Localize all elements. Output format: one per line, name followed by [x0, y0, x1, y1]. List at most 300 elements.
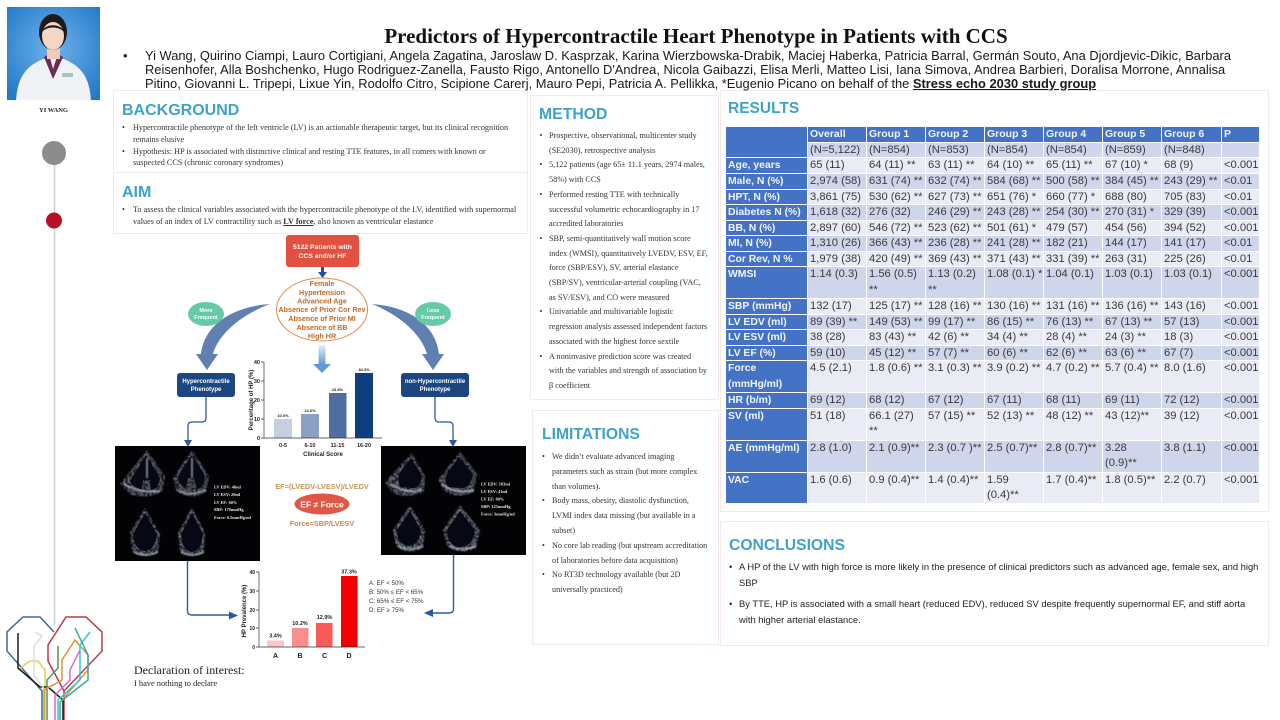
results table: <0.01	[1224, 237, 1252, 249]
results table: **	[869, 284, 878, 296]
badge: less frequent	[415, 302, 451, 326]
results table: 660 (77) *	[1046, 191, 1095, 203]
results table: (N=848)	[1164, 144, 1205, 156]
results table: 66.1 (27)	[869, 410, 914, 422]
badge: less frequent: Frequent	[421, 315, 445, 321]
results table: Group 3	[987, 128, 1027, 140]
results table: 1.6 (0.6)	[810, 474, 852, 486]
formula: force: Force=SBP/LVESV	[290, 519, 354, 528]
results table: BB, N (%)	[728, 223, 775, 234]
method text: (SBP/SV), ventricular-arterial coupling (VAC,	[549, 278, 701, 287]
results table: 149 (53) **	[869, 316, 922, 328]
declaration of interest	[134, 663, 245, 688]
results table: (N=859)	[1105, 144, 1146, 156]
badge: more frequent	[188, 302, 224, 326]
results table: 2.1 (0.9)**	[869, 442, 919, 454]
results table: <0.001	[1224, 394, 1259, 406]
badge: ef not force	[294, 494, 350, 514]
results table: 1.7 (0.4)**	[1046, 474, 1096, 486]
results table: 125 (17) **	[869, 300, 922, 312]
results table: Male, N (%)	[728, 176, 783, 187]
results table: 8.0 (1.6)	[1164, 362, 1206, 374]
method text: •	[540, 131, 542, 140]
box: non-hypercontractile phenotype: Phenotype	[420, 387, 451, 393]
box: patients: 5122 Patients with	[293, 244, 352, 251]
results table: 369 (43) **	[928, 253, 982, 265]
heading: method: METHOD	[539, 106, 607, 123]
results table: 225 (26)	[1164, 253, 1206, 265]
panel: aim	[113, 172, 528, 234]
heading: conclusions: CONCLUSIONS	[729, 537, 845, 554]
echo images: non-hypercontractile: SBP: 125mmHg	[481, 504, 511, 509]
method text: accredited laboratories	[549, 219, 623, 228]
results table: WMSI	[728, 269, 756, 280]
results table: 501 (61) *	[987, 222, 1036, 234]
box: hypercontractile phenotype: Phenotype	[191, 387, 222, 393]
flowchart diagram	[115, 235, 526, 660]
bar chart: clinical score: 30	[254, 379, 260, 385]
oval: clinical predictors: Female	[310, 279, 334, 288]
oval: clinical predictors	[276, 278, 368, 341]
badge: less frequent: Less	[427, 308, 439, 314]
limitations text: No RT3D technology available (but 2D	[552, 570, 680, 579]
results table: 67 (13) **	[1105, 316, 1152, 328]
oval: clinical predictors: Absence of BB	[296, 323, 348, 332]
method text: •	[540, 190, 542, 199]
aim text: values of an index of LV contractility such as LV force, also known as ventricular elastance	[133, 217, 433, 226]
oval: clinical predictors: Absence of Prior Cor Rev	[278, 305, 366, 314]
results table: 584 (68) **	[987, 175, 1040, 187]
results table: 69 (11)	[1105, 394, 1140, 406]
results table: 1,310 (26)	[810, 237, 861, 249]
results table	[726, 127, 1259, 503]
bar chart: hp prevalence by ef: 40	[249, 570, 255, 576]
limitations text: universally practiced)	[552, 585, 623, 594]
panel: limitations	[532, 410, 719, 645]
results table: SBP (mmHg)	[728, 301, 791, 312]
results table: (mmHg/ml)	[728, 379, 782, 390]
results table: 1.8 (0.5)**	[1105, 474, 1155, 486]
results table: 688 (80)	[1105, 191, 1147, 203]
box: non-hypercontractile phenotype	[401, 373, 469, 397]
results table: 52 (13) **	[987, 410, 1034, 422]
echo images: hypercontractile: LV EF: 60%	[214, 500, 237, 505]
results table: (0.9)**	[1105, 457, 1137, 469]
legend: ef classes: B: 50% ≤ EF < 65%	[369, 589, 424, 596]
results table: 141 (17)	[1164, 237, 1206, 249]
heading: background: BACKGROUND	[122, 102, 239, 119]
box: hypercontractile phenotype	[177, 373, 235, 397]
bar chart: hp prevalence by ef: 10.2%	[292, 621, 308, 627]
timeline	[42, 141, 66, 625]
box: patients	[286, 235, 359, 267]
results table: <0.01	[1224, 175, 1252, 187]
authors	[123, 48, 1232, 91]
background text: suspected CCS (chronic coronary syndromes)	[133, 158, 283, 167]
oval: clinical predictors: Absence of Prior MI	[288, 314, 356, 323]
results table: 1.8 (0.6) **	[869, 362, 922, 374]
results table: 2,897 (60)	[810, 222, 861, 234]
results table: 651 (76) *	[987, 191, 1036, 203]
results table: 143 (16)	[1164, 300, 1206, 312]
method text: β coefficient	[549, 381, 590, 390]
limitations text: subset)	[552, 526, 575, 535]
method text: Performed resting TTE with technically	[549, 190, 679, 199]
conclusions text: with higher arterial elastance.	[739, 615, 861, 625]
results table: 0.9 (0.4)**	[869, 474, 919, 486]
results table: 132 (17)	[810, 300, 852, 312]
bar chart: hp prevalence by ef: D	[346, 653, 352, 660]
results table: 45 (12) **	[869, 347, 916, 359]
formula: ejection fraction: EF=(LVEDV-LVESV)/LVEDV	[275, 482, 369, 491]
connector: right to echo	[435, 397, 457, 447]
conclusions text: By TTE, HP is associated with a small heart (reduced EDV), reduced SV despite frequently supernormal EF, and stiff aorta	[739, 599, 1245, 609]
results table: 67 (11)	[987, 394, 1022, 406]
arrow: less frequent	[372, 304, 444, 370]
results table: (N=854)	[869, 144, 910, 156]
bar chart: hp prevalence by ef: 12.9%	[317, 615, 332, 621]
results table: 2,974 (58)	[810, 175, 861, 187]
results table: 705 (83)	[1164, 191, 1206, 203]
results table: 68 (9)	[1164, 159, 1193, 171]
badge: more frequent: More	[199, 308, 213, 314]
echo images: hypercontractile: SBP: 170mmHg	[214, 507, 244, 512]
results table: 24 (3) **	[1105, 331, 1146, 343]
results table: 57 (7) **	[928, 347, 969, 359]
results table: 1.04 (0.1)	[1046, 268, 1094, 280]
results table: <0.001	[1224, 474, 1259, 486]
results table: 86 (15) **	[987, 316, 1034, 328]
results table: HPT, N (%)	[728, 192, 780, 203]
oval: clinical predictors: High HR	[308, 332, 337, 340]
results table: 1,618 (32)	[810, 206, 861, 218]
method text: Prospective, observational, multicenter study	[549, 131, 697, 140]
limitations text: •	[542, 452, 545, 461]
background text	[122, 123, 508, 167]
results table: **	[928, 284, 937, 296]
results table: 38 (28)	[810, 331, 845, 343]
authors: Reisenhofer, Alla Boshchenko, Hugo Rodriguez-Zanella, Fausto Rigo, Antonello D'Andrea, Nicola Gaibazzi, Elisa Merli, Matteo Lisi, Iana Simova, Andrea Barbieri, Doralisa Morrone, Annalisa	[145, 62, 1225, 77]
method text: A noninvasive prediction score was created	[549, 352, 691, 361]
results table: 530 (62) **	[869, 191, 922, 203]
results table: <0.001	[1224, 159, 1259, 171]
panel: background	[113, 90, 528, 173]
bar chart: hp prevalence by ef: 0	[252, 645, 255, 651]
bar chart: clinical score: 0-5	[279, 443, 287, 449]
arrow: patients to predictors	[318, 267, 327, 278]
results table: 1.14 (0.3)	[810, 268, 858, 280]
method text: •	[540, 160, 542, 169]
results table: 394 (52)	[1164, 222, 1206, 234]
panel: conclusions	[720, 521, 1269, 646]
results table: AE (mmHg/ml)	[728, 443, 800, 454]
results table: 68 (12)	[869, 394, 904, 406]
results table: 523 (62) **	[928, 222, 982, 234]
results table: 276 (32)	[869, 206, 911, 218]
results table: <0.001	[1224, 362, 1259, 374]
results table: 83 (43) **	[869, 331, 916, 343]
heading: limitations: LIMITATIONS	[542, 426, 640, 443]
results table: 65 (11)	[810, 159, 845, 171]
results table: 546 (72) **	[869, 222, 922, 234]
box: non-hypercontractile phenotype: non-Hypercontractile	[405, 379, 466, 385]
method text	[540, 131, 708, 390]
results table: 236 (28) **	[928, 237, 982, 249]
legend: ef classes: D: EF ≥ 75%	[369, 607, 405, 614]
bar chart: clinical score: 10.0%	[277, 413, 289, 418]
limitations text: Body mass, obesity, diastolic dysfunction,	[552, 496, 689, 505]
results table: (N=5,122)	[810, 144, 860, 156]
bar chart: clinical score: 6-10	[304, 443, 316, 449]
oval: clinical predictors: Hypertension	[299, 288, 345, 297]
results table: 1.08 (0.1) *	[987, 268, 1042, 280]
connector: left echo to ef chart	[188, 561, 238, 620]
results table: 4.7 (0.2) **	[1046, 362, 1099, 374]
conclusions text: SBP	[739, 578, 758, 588]
legend: ef classes: C: 65% ≤ EF < 75%	[369, 598, 424, 605]
limitations text: •	[542, 541, 545, 550]
echo images: hypercontractile: LV ESV: 20ml	[214, 492, 241, 497]
bar chart: clinical score: 40	[254, 360, 260, 366]
results table: 65 (11) **	[1046, 159, 1092, 171]
method text: •	[540, 307, 542, 316]
bar chart: clinical score: 34.3%	[358, 367, 370, 372]
bar chart: clinical score: 23.8%	[332, 387, 344, 392]
results table: (N=854)	[987, 144, 1028, 156]
echo images: non-hypercontractile	[381, 446, 526, 555]
results table: <0.001	[1224, 331, 1259, 343]
declaration of interest: Declaration of interest:	[134, 663, 245, 677]
results table: 2.8 (1.0)	[810, 442, 852, 454]
authors: •	[123, 48, 128, 62]
echo images: non-hypercontractile: LV ESV: 41ml	[481, 489, 508, 494]
arrow: more frequent	[196, 304, 270, 370]
bar chart: hp prevalence by ef: 20	[249, 608, 255, 614]
limitations text: than volumes).	[552, 482, 600, 491]
conclusions text: •	[729, 562, 732, 572]
bar chart: clinical score: 10	[254, 417, 260, 423]
panel: method	[530, 95, 719, 400]
echo images: hypercontractile: Force: 6.5mmHg/ml	[214, 515, 252, 520]
results table: P	[1224, 128, 1231, 140]
bar chart: clinical score: Clinical Score	[303, 452, 344, 458]
bar chart: hp prevalence by ef: C	[322, 653, 327, 660]
authors: Pitino, Giovanni L. Tripepi, Lixue Yin, Rodolfo Citro, Scipione Carerj, Mauro Pepi, Patricia A. Pellikka, *Eugenio Picano on behalf of the Stress echo 2030 study group	[145, 76, 1096, 91]
results table: 4.5 (2.1)	[810, 362, 852, 374]
method text: Univariable and multivariable logistic	[549, 307, 673, 316]
results table: 89 (39) **	[810, 316, 857, 328]
legend: ef classes	[369, 580, 424, 614]
aim text	[122, 205, 516, 226]
background text: Hypothesis: HP is associated with distinctive clinical and resting TTE features, in all comers with known or	[133, 147, 486, 156]
legend: ef classes: A: EF < 50%	[369, 580, 404, 587]
method text: index (WMSI), quantitatively LVEDV, ESV, EF,	[549, 249, 708, 258]
results table: <0.01	[1224, 253, 1252, 265]
bar chart: clinical score: Percentage of HP (%)	[249, 370, 255, 430]
limitations text	[542, 452, 707, 594]
results table: (N=853)	[928, 144, 969, 156]
results table: **	[869, 425, 878, 437]
results table: <0.001	[1224, 316, 1259, 328]
results table: <0.001	[1224, 347, 1259, 359]
results table: 76 (13) **	[1046, 316, 1093, 328]
results table: 479 (57)	[1046, 222, 1088, 234]
results table: 366 (43) **	[869, 237, 922, 249]
background text: •	[122, 147, 125, 156]
logo: metro-line heart	[6, 616, 103, 720]
method text: •	[540, 352, 542, 360]
bar chart: hp prevalence by ef: A	[273, 653, 278, 660]
results table: 371 (43) **	[987, 253, 1040, 265]
method text: associated with the highest force sextile	[549, 337, 679, 346]
bar chart: hp prevalence by ef: HP Prevalence (%)	[242, 585, 248, 637]
results table: Group 4	[1046, 128, 1086, 140]
results table: 246 (29) **	[928, 206, 982, 218]
results table: Group 6	[1164, 128, 1204, 140]
results table: 39 (12)	[1164, 410, 1199, 422]
bar chart: clinical score: 13.0%	[304, 408, 316, 413]
conclusions text	[729, 562, 1258, 625]
results table: 64 (10) **	[987, 159, 1034, 171]
badge: more frequent: Frequent	[194, 315, 218, 321]
results table: 1,979 (38)	[810, 253, 861, 265]
results table: 1.03 (0.1)	[1105, 268, 1153, 280]
results table: 67 (10) *	[1105, 159, 1148, 171]
results table: 63 (6) **	[1105, 347, 1146, 359]
echo images: non-hypercontractile: LV EF: 60%	[481, 496, 504, 502]
results table: Diabetes N (%)	[728, 207, 801, 218]
bar chart: clinical score: 16-20	[357, 443, 371, 449]
bar chart: hp prevalence by ef: 30	[249, 589, 255, 595]
results table: 1.59	[987, 474, 1009, 486]
method text: with the variables and strength of association by	[549, 366, 707, 375]
results table: 34 (4) **	[987, 331, 1028, 343]
bar chart: clinical score: 0	[257, 436, 260, 442]
results table: 2.8 (0.7)**	[1046, 442, 1096, 454]
method text: as SV/ESV), and CO were measured	[549, 293, 670, 302]
results table: HR (b/m)	[728, 395, 771, 406]
limitations text: LVMI index data missing (but available in a	[552, 511, 695, 520]
results table: 63 (11) **	[928, 159, 974, 171]
results table: 128 (16) **	[928, 300, 982, 312]
results table: 136 (16) **	[1105, 300, 1158, 312]
results table: 51 (18)	[810, 410, 845, 422]
results table: 130 (16) **	[987, 300, 1040, 312]
results table: (N=854)	[1046, 144, 1087, 156]
results table: Group 1	[869, 128, 909, 140]
results table: Overall	[810, 128, 846, 140]
results table: <0.001	[1224, 442, 1259, 454]
aim text: To assess the clinical variables associated with the hypercontractile phenotype of the LV, identified with supernormal	[133, 205, 516, 214]
results table: (0.4)**	[987, 489, 1019, 501]
results table: 57 (13)	[1164, 316, 1199, 328]
aim text: •	[122, 205, 125, 214]
results table: LV EDV (ml)	[728, 317, 787, 328]
limitations text: •	[542, 496, 545, 505]
results table: 64 (11) **	[869, 159, 915, 171]
results table: 62 (6) **	[1046, 347, 1087, 359]
results table: 632 (74) **	[928, 175, 982, 187]
limitations text: parameters such as strain (but more complex	[552, 467, 697, 476]
method text: successful volumetric echocardiography in 17	[549, 205, 700, 214]
method text: •	[540, 234, 542, 243]
results table: SV (ml)	[728, 411, 764, 422]
results table: <0.01	[1224, 191, 1252, 203]
results table: VAC	[728, 475, 749, 486]
background text: •	[122, 123, 125, 132]
results table: 2.2 (0.7)	[1164, 474, 1206, 486]
heading: aim: AIM	[122, 184, 151, 201]
connector: left to echo	[184, 397, 206, 447]
results table: 384 (45) **	[1105, 175, 1158, 187]
results table: 1.13 (0.2)	[928, 268, 976, 280]
results table: LV EF (%)	[728, 348, 776, 359]
results table: 420 (49) **	[869, 253, 922, 265]
bar chart: hp prevalence by ef: 10	[249, 626, 255, 632]
results table: LV ESV (ml)	[728, 332, 786, 343]
limitations text: No core lab reading (but upstream accreditation	[552, 541, 707, 550]
results table: Group 2	[928, 128, 968, 140]
results table: 454 (56)	[1105, 222, 1147, 234]
results table: 631 (74) **	[869, 175, 922, 187]
results table: Age, years	[728, 160, 781, 171]
results table: 3.1 (0.3) **	[928, 362, 981, 374]
echo images: hypercontractile	[115, 446, 260, 561]
declaration of interest: I have nothing to declare	[134, 679, 217, 688]
box: patients: CCS and/or HF	[299, 253, 346, 260]
method text: 5,122 patients (age 65± 11.1 years, 2974 males,	[549, 160, 705, 169]
results table: 243 (29) **	[1164, 175, 1218, 187]
results table: 627 (73) **	[928, 191, 982, 203]
method text: (SE2030), retrospective analysis	[549, 146, 655, 155]
results table: 1.4 (0.4)**	[928, 474, 978, 486]
limitations text: of laboratories before data acquisition)	[552, 556, 678, 565]
panel: results	[720, 90, 1269, 512]
results table: 18 (3)	[1164, 331, 1193, 343]
results table: 3.8 (1.1)	[1164, 442, 1206, 454]
results table: <0.001	[1224, 410, 1259, 422]
results table: 43 (12)**	[1105, 410, 1149, 422]
bar chart: hp prevalence by ef: B	[297, 653, 303, 660]
background text: Hypercontractile phenotype of the left ventricle (LV) is an actionable therapeutic target, but its clinical recognition	[133, 123, 508, 132]
connector: right echo to ef chart	[424, 555, 454, 617]
oval: clinical predictors: Advanced Age	[297, 296, 347, 306]
results table: 144 (17)	[1105, 237, 1147, 249]
bar chart: hp prevalence by ef	[242, 570, 365, 660]
results table: 131 (16) **	[1046, 300, 1100, 312]
results table: <0.001	[1224, 268, 1259, 280]
title: Predictors of Hypercontractile Heart Phenotype in Patients with CCS	[384, 24, 1008, 48]
results table: 5.7 (0.4) **	[1105, 362, 1158, 374]
results table: 57 (15) **	[928, 410, 975, 422]
method text: force (SBP/ESV), SV, arterial elastance	[549, 263, 678, 272]
results table: <0.001	[1224, 222, 1259, 234]
results table: 1.03 (0.1)	[1164, 268, 1212, 280]
results table: 99 (17) **	[928, 316, 975, 328]
results table: 243 (28) **	[987, 206, 1040, 218]
arrow: score chart	[313, 345, 331, 373]
results table: 2.5 (0.7)**	[987, 442, 1037, 454]
results table: 3,861 (75)	[810, 191, 861, 203]
presenter name: YI WANG	[39, 107, 68, 114]
results table: 254 (30) **	[1046, 206, 1100, 218]
results table: 263 (31)	[1105, 253, 1147, 265]
bar chart: hp prevalence by ef: 37.3%	[341, 570, 357, 576]
badge: ef not force: EF ≠ Force	[300, 500, 344, 510]
results table: 28 (4) **	[1046, 331, 1087, 343]
echo images: non-hypercontractile: Force: 3mmHg/ml	[481, 512, 515, 516]
results table: 182 (21)	[1046, 237, 1088, 249]
